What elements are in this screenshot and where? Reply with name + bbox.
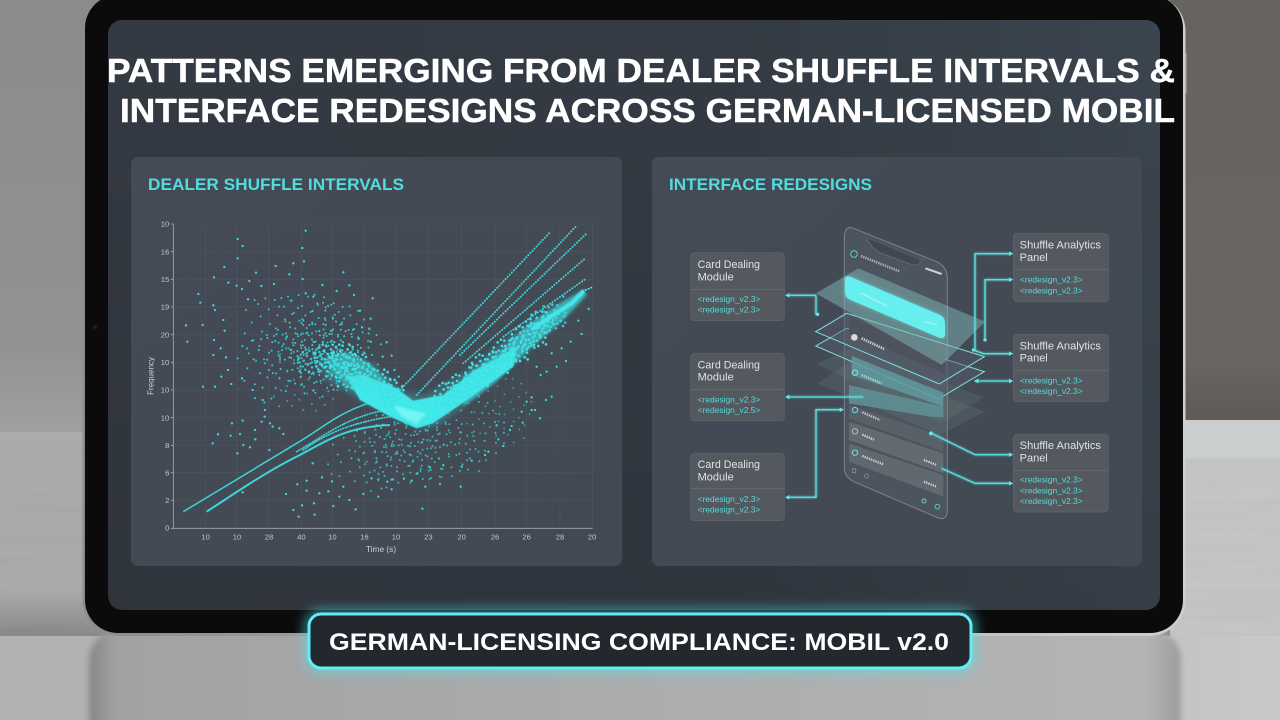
list row dark bbox=[849, 317, 945, 373]
x axis tick labels: 26 bbox=[491, 533, 499, 542]
list row teal 2 bbox=[849, 385, 943, 417]
x axis tick labels: 28 bbox=[556, 533, 564, 542]
callout: card dealing module 2: Card Dealing bbox=[698, 359, 760, 371]
x axis tick labels bbox=[201, 533, 596, 542]
callout: card dealing module 1: <redesign_v2.3> bbox=[698, 295, 761, 304]
x axis tick labels: 20 bbox=[588, 533, 596, 542]
callout: card dealing module 3: <redesign_v2.3> bbox=[698, 495, 761, 504]
y axis tick labels: 10 bbox=[161, 358, 169, 367]
phone shell bbox=[844, 228, 947, 519]
y axis tick labels: 10 bbox=[161, 220, 169, 229]
callout: shuffle analytics panel 3: <redesign_v2.3> bbox=[1020, 497, 1083, 506]
tablet screen bbox=[108, 20, 1160, 610]
callout: card dealing module 3: <redesign_v2.3> bbox=[698, 506, 761, 515]
panel heading: interface redesigns: INTERFACE REDESIGNS bbox=[669, 175, 872, 194]
callout: shuffle analytics panel 3: <redesign_v2.3> bbox=[1020, 486, 1083, 495]
tablet bbox=[80, 0, 1187, 636]
callout: card dealing module 3 bbox=[698, 459, 761, 515]
lower translucent layers bbox=[817, 348, 985, 435]
scatter: dense V-shaped band bbox=[298, 287, 593, 428]
list row 4 bbox=[849, 422, 943, 473]
title: PATTERNS EMERGING FROM DEALER SHUFFLE INTERVALS & bbox=[107, 52, 1175, 89]
front camera bbox=[93, 325, 97, 329]
callout: card dealing module 1: <redesign_v2.3> bbox=[698, 306, 761, 315]
list row 3 bbox=[849, 405, 943, 452]
callout: shuffle analytics panel 2: <redesign_v2.3> bbox=[1020, 387, 1083, 396]
x axis tick labels: 10 bbox=[201, 533, 210, 542]
callout: shuffle analytics panel 2: <redesign_v2.3> bbox=[1020, 376, 1083, 385]
x axis tick labels: 10 bbox=[233, 533, 241, 542]
exploded phone diagram bbox=[691, 228, 1108, 521]
module boxes bbox=[691, 233, 1108, 521]
side buttons bbox=[80, 47, 1187, 93]
callout: shuffle analytics panel 1: Shuffle Analytics bbox=[1020, 239, 1102, 251]
y axis tick labels bbox=[161, 220, 169, 533]
callout: card dealing module 1: Module bbox=[698, 271, 734, 283]
tablet reflection bbox=[89, 630, 1181, 720]
callout: shuffle analytics panel 3: Shuffle Analytics bbox=[1020, 440, 1102, 452]
glass layer outline 1 bbox=[816, 313, 984, 384]
chart axes bbox=[171, 224, 593, 528]
connector arrows bbox=[788, 254, 1010, 497]
y axis tick labels: 10 bbox=[161, 386, 169, 395]
y axis tick labels: 15 bbox=[161, 275, 169, 284]
highlighted card bbox=[845, 276, 945, 338]
callout: shuffle analytics panel 3 bbox=[1020, 440, 1102, 506]
callout: shuffle analytics panel 3: Panel bbox=[1020, 453, 1048, 465]
scatter: diverging straight lines bbox=[400, 226, 586, 395]
scatter chart bbox=[147, 220, 596, 554]
list row teal 1 bbox=[852, 356, 943, 407]
x axis tick labels: 28 bbox=[265, 533, 273, 542]
marble table bbox=[0, 420, 1280, 720]
y axis tick labels: 2 bbox=[165, 496, 169, 505]
callout: card dealing module 2: <redesign_v2.3> bbox=[698, 395, 761, 404]
x axis title: Time (s) bbox=[366, 544, 396, 554]
phone notch and status bar bbox=[867, 238, 923, 265]
y axis tick labels: 19 bbox=[161, 303, 169, 312]
callout: shuffle analytics panel 2: Shuffle Analytics bbox=[1020, 340, 1102, 352]
background wall left bbox=[0, 0, 100, 432]
phone header row bbox=[851, 251, 942, 274]
x axis tick labels: 26 bbox=[522, 533, 531, 542]
glass layer outline 2 bbox=[816, 328, 984, 399]
tablet shadow on table bbox=[0, 590, 100, 636]
callout: shuffle analytics panel 2: Panel bbox=[1020, 353, 1048, 365]
callout: card dealing module 1 bbox=[698, 259, 761, 315]
callout: card dealing module 3: Module bbox=[698, 471, 734, 483]
compliance badge: GERMAN-LICENSING COMPLIANCE: MOBIL v2.0 bbox=[329, 629, 949, 656]
phone nav icons bbox=[852, 469, 940, 509]
panel heading: dealer shuffle intervals: DEALER SHUFFLE INTERVALS bbox=[148, 175, 404, 194]
callout: card dealing module 2: Module bbox=[698, 372, 734, 384]
callout: card dealing module 1: Card Dealing bbox=[698, 259, 760, 271]
callout: shuffle analytics panel 1: <redesign_v2.3> bbox=[1020, 276, 1083, 285]
y axis tick labels: 10 bbox=[161, 413, 169, 422]
background wall right bbox=[1170, 0, 1280, 422]
callout: card dealing module 3: Card Dealing bbox=[698, 459, 760, 471]
chart grid bbox=[173, 224, 593, 528]
scatter: upper cloud bbox=[232, 295, 387, 416]
callout: shuffle analytics panel 1: Panel bbox=[1020, 252, 1048, 264]
title bbox=[107, 52, 1175, 129]
x axis tick labels: 20 bbox=[457, 533, 466, 542]
x axis tick labels: 16 bbox=[360, 533, 369, 542]
title: INTERFACE REDESIGNS ACROSS GERMAN-LICENSED MOBIL bbox=[120, 92, 1175, 129]
list row 5 bbox=[849, 443, 943, 497]
callout: shuffle analytics panel 3: <redesign_v2.3> bbox=[1020, 476, 1083, 485]
panel: interface redesigns bbox=[652, 157, 1142, 566]
x axis tick labels: 10 bbox=[392, 533, 400, 542]
x axis tick labels: 23 bbox=[424, 533, 433, 542]
callout: shuffle analytics panel 1 bbox=[1020, 239, 1102, 295]
x axis tick labels: 40 bbox=[297, 533, 306, 542]
x axis tick labels: 10 bbox=[328, 533, 337, 542]
callout: card dealing module 2: <redesign_v2.5> bbox=[698, 406, 761, 415]
callout: shuffle analytics panel 2 bbox=[1020, 340, 1102, 396]
top glass layer bbox=[816, 268, 985, 365]
y axis tick labels: 16 bbox=[161, 247, 169, 256]
y axis title: Frequency bbox=[147, 357, 156, 395]
y axis tick labels: 0 bbox=[165, 524, 169, 533]
y axis tick labels: 8 bbox=[165, 441, 169, 450]
panel: dealer shuffle intervals bbox=[131, 157, 622, 566]
arrowheads bbox=[785, 251, 1013, 500]
callout: card dealing module 2 bbox=[698, 359, 761, 415]
compliance badge bbox=[309, 614, 971, 668]
callout: shuffle analytics panel 1: <redesign_v2.3> bbox=[1020, 286, 1083, 295]
scatter: lower cloud bbox=[321, 369, 538, 496]
scatter: rising lower-left trend lines bbox=[183, 403, 390, 512]
scatter: sparse outliers bbox=[186, 231, 589, 517]
y axis tick labels: 6 bbox=[165, 468, 169, 477]
y axis tick labels: 20 bbox=[161, 330, 169, 339]
